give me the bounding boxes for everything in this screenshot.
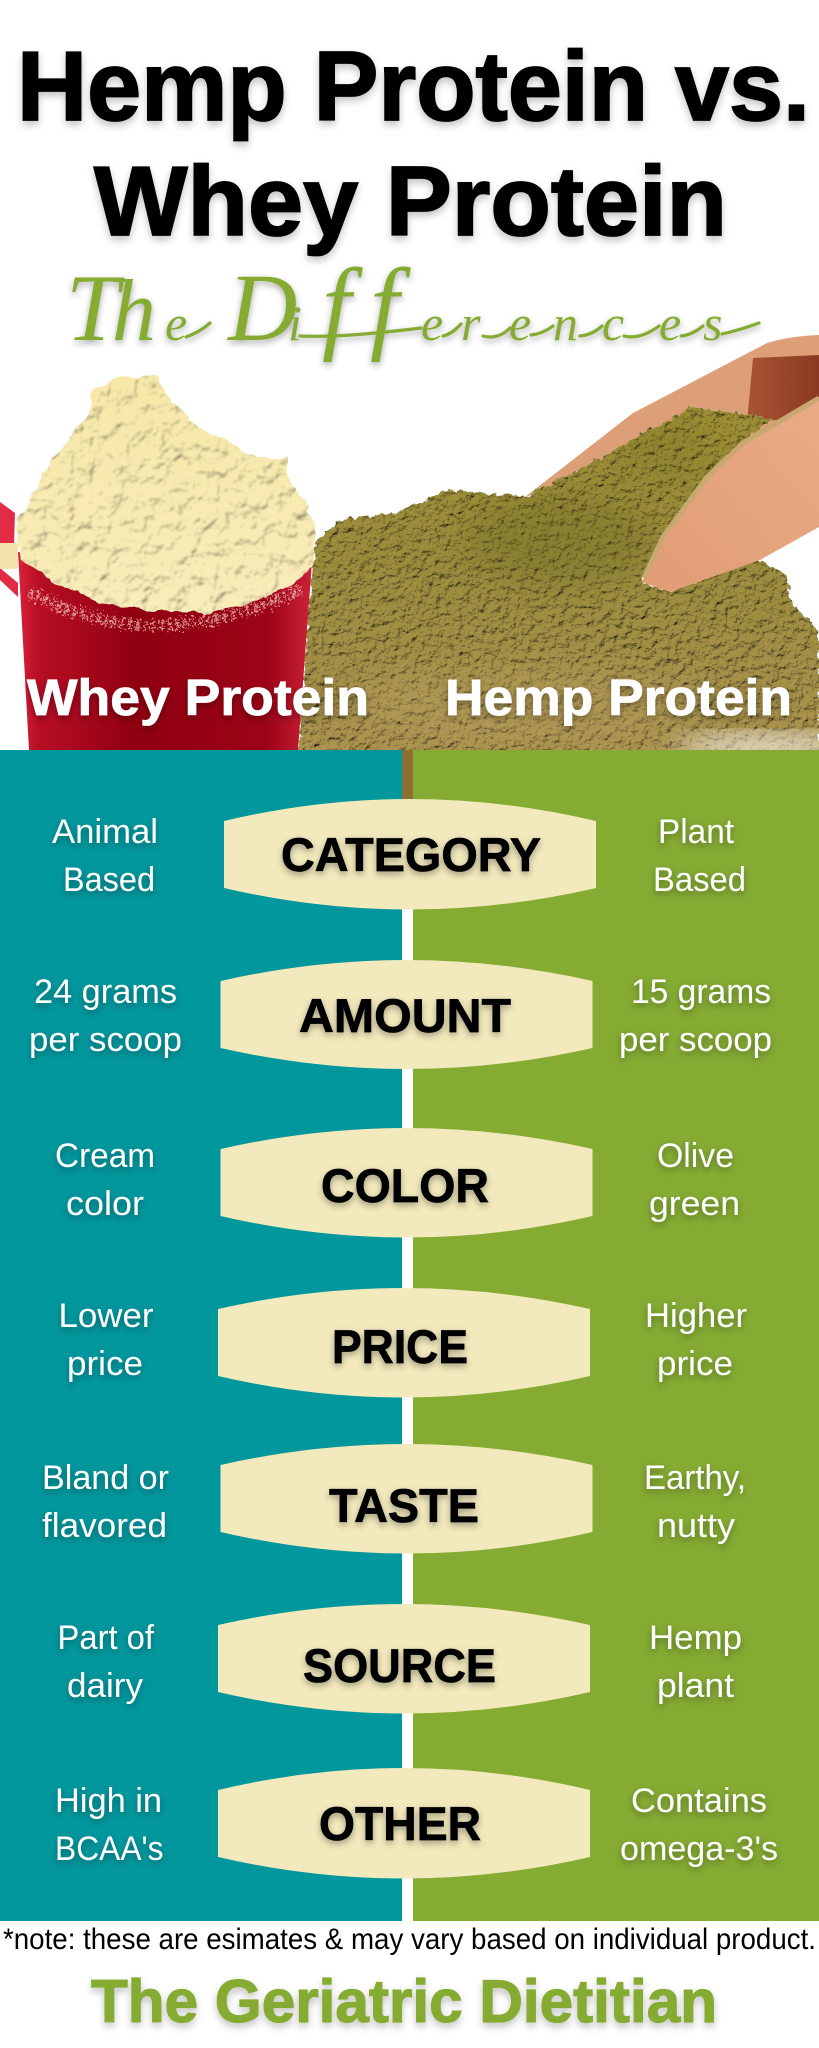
whey: lower price: [58, 1297, 154, 1383]
hemp: contains omega-3's: omega-3's: [620, 1830, 778, 1868]
whey: cream color: [55, 1137, 155, 1223]
row: source: [58, 1604, 742, 1714]
hemp: 15 grams: per scoop: [619, 1021, 772, 1059]
whey: bland or flavored: flavored: [42, 1507, 167, 1545]
hemp: higher price: [645, 1297, 747, 1383]
hemp: earthy, nutty: Earthy,: [644, 1459, 746, 1497]
whey: animal based: Based: [63, 861, 155, 899]
hemp powder pile: [298, 407, 819, 760]
subtitle: The Differences: h: [112, 263, 156, 360]
hemp: earthy, nutty: [644, 1459, 746, 1545]
taste label: TASTE: [329, 1479, 479, 1532]
powder dust on cup: [30, 590, 300, 626]
hemp: higher price: price: [657, 1345, 733, 1383]
hemp: 15 grams: 15 grams: [631, 973, 771, 1011]
title: Whey Protein: [94, 146, 727, 256]
whey: lower price: price: [67, 1345, 143, 1383]
panel: whey column: [0, 750, 402, 1921]
color label: COLOR: [321, 1159, 489, 1212]
hemp: hemp plant: Hemp: [649, 1619, 742, 1657]
pill: [218, 1604, 590, 1714]
panel: hemp column: [413, 750, 819, 1921]
hemp: plant based: [653, 813, 746, 899]
label: Whey Protein: Whey Protein: [27, 669, 369, 726]
pill: [218, 1288, 590, 1398]
row: price: [58, 1288, 747, 1398]
whey: part of dairy: [58, 1619, 155, 1705]
photo: hemp powder with wooden scoop: [298, 335, 819, 760]
pill: [220, 1128, 592, 1238]
cream powder mound: [16, 375, 316, 612]
category label: CATEGORY: [281, 828, 541, 881]
row: category: [52, 799, 746, 910]
whey: high in BCAA's: BCAA's: [55, 1830, 164, 1868]
subtitle: The Differences: e: [165, 295, 187, 351]
whey: cream color: Cream: [55, 1137, 155, 1175]
whey: 24 grams: per scoop: [29, 1021, 182, 1059]
whey: animal based: Animal: [52, 813, 158, 851]
scoop interior: [747, 355, 819, 422]
hemp: earthy, nutty: nutty: [657, 1507, 735, 1545]
hemp: plant based: Plant: [658, 813, 735, 851]
whey: bland or flavored: [42, 1459, 169, 1545]
hemp: higher price: Higher: [645, 1297, 747, 1335]
row: color: [55, 1128, 740, 1238]
pill: [220, 1444, 592, 1554]
scoop handle: [0, 502, 18, 597]
hemp: contains omega-3's: [620, 1782, 778, 1868]
title: Hemp Protein vs.: [17, 31, 810, 141]
hemp: contains omega-3's: Contains: [631, 1782, 767, 1820]
source label: SOURCE: [303, 1639, 496, 1692]
row: amount: [29, 960, 772, 1069]
row: other: [55, 1768, 778, 1878]
hemp: olive green: [649, 1137, 740, 1223]
subtitle: The Differences: ff: [322, 248, 411, 363]
hemp: hemp plant: plant: [657, 1667, 735, 1705]
hemp: olive green: green: [649, 1185, 740, 1223]
subtitle: The Differences: T: [66, 255, 125, 361]
amount label: AMOUNT: [299, 989, 511, 1042]
pile shading: [330, 415, 710, 741]
hemp strip in centre gap: [402, 750, 413, 802]
hemp: olive green: Olive: [657, 1137, 734, 1175]
photo: whey powder in red scoop: [0, 375, 316, 750]
spilled powder: [0, 543, 18, 569]
label: Hemp Protein: Hemp Protein: [445, 669, 792, 726]
whey: 24 grams: 24 grams: [34, 973, 177, 1011]
scoop rim: [644, 398, 819, 578]
whey: part of dairy: Part of: [58, 1619, 155, 1657]
subtitle: The Differences: [66, 248, 759, 363]
scoop back: [525, 335, 819, 497]
other label: OTHER: [319, 1797, 481, 1850]
red cup: [18, 552, 312, 750]
whey: cream color: color: [66, 1185, 144, 1223]
subtitle: The Differences: erences: [421, 295, 722, 351]
title: [17, 31, 810, 256]
row: taste: [42, 1444, 746, 1554]
hemp: plant based: Based: [653, 861, 746, 899]
hemp: hemp plant: [649, 1619, 742, 1705]
whey: animal based: [52, 813, 158, 899]
pill: [224, 799, 596, 910]
footer brand: The Geriatric Dietitian: [91, 1968, 717, 2035]
hemp: 15 grams: [619, 973, 772, 1059]
scoop front: [642, 398, 819, 592]
whey: bland or flavored: Bland or: [42, 1459, 169, 1497]
pill: [220, 960, 592, 1069]
pill: [218, 1768, 590, 1878]
whey: high in BCAA's: High in: [55, 1782, 162, 1820]
whey: lower price: Lower: [58, 1297, 154, 1335]
whey: 24 grams: [29, 973, 182, 1059]
subtitle: The Differences: D: [226, 254, 297, 361]
whey: part of dairy: dairy: [67, 1667, 143, 1705]
subtitle: The Differences: i: [288, 295, 302, 351]
whey: high in BCAA's: [55, 1782, 164, 1868]
price label: PRICE: [332, 1320, 468, 1373]
white patch on the table: [675, 736, 819, 760]
